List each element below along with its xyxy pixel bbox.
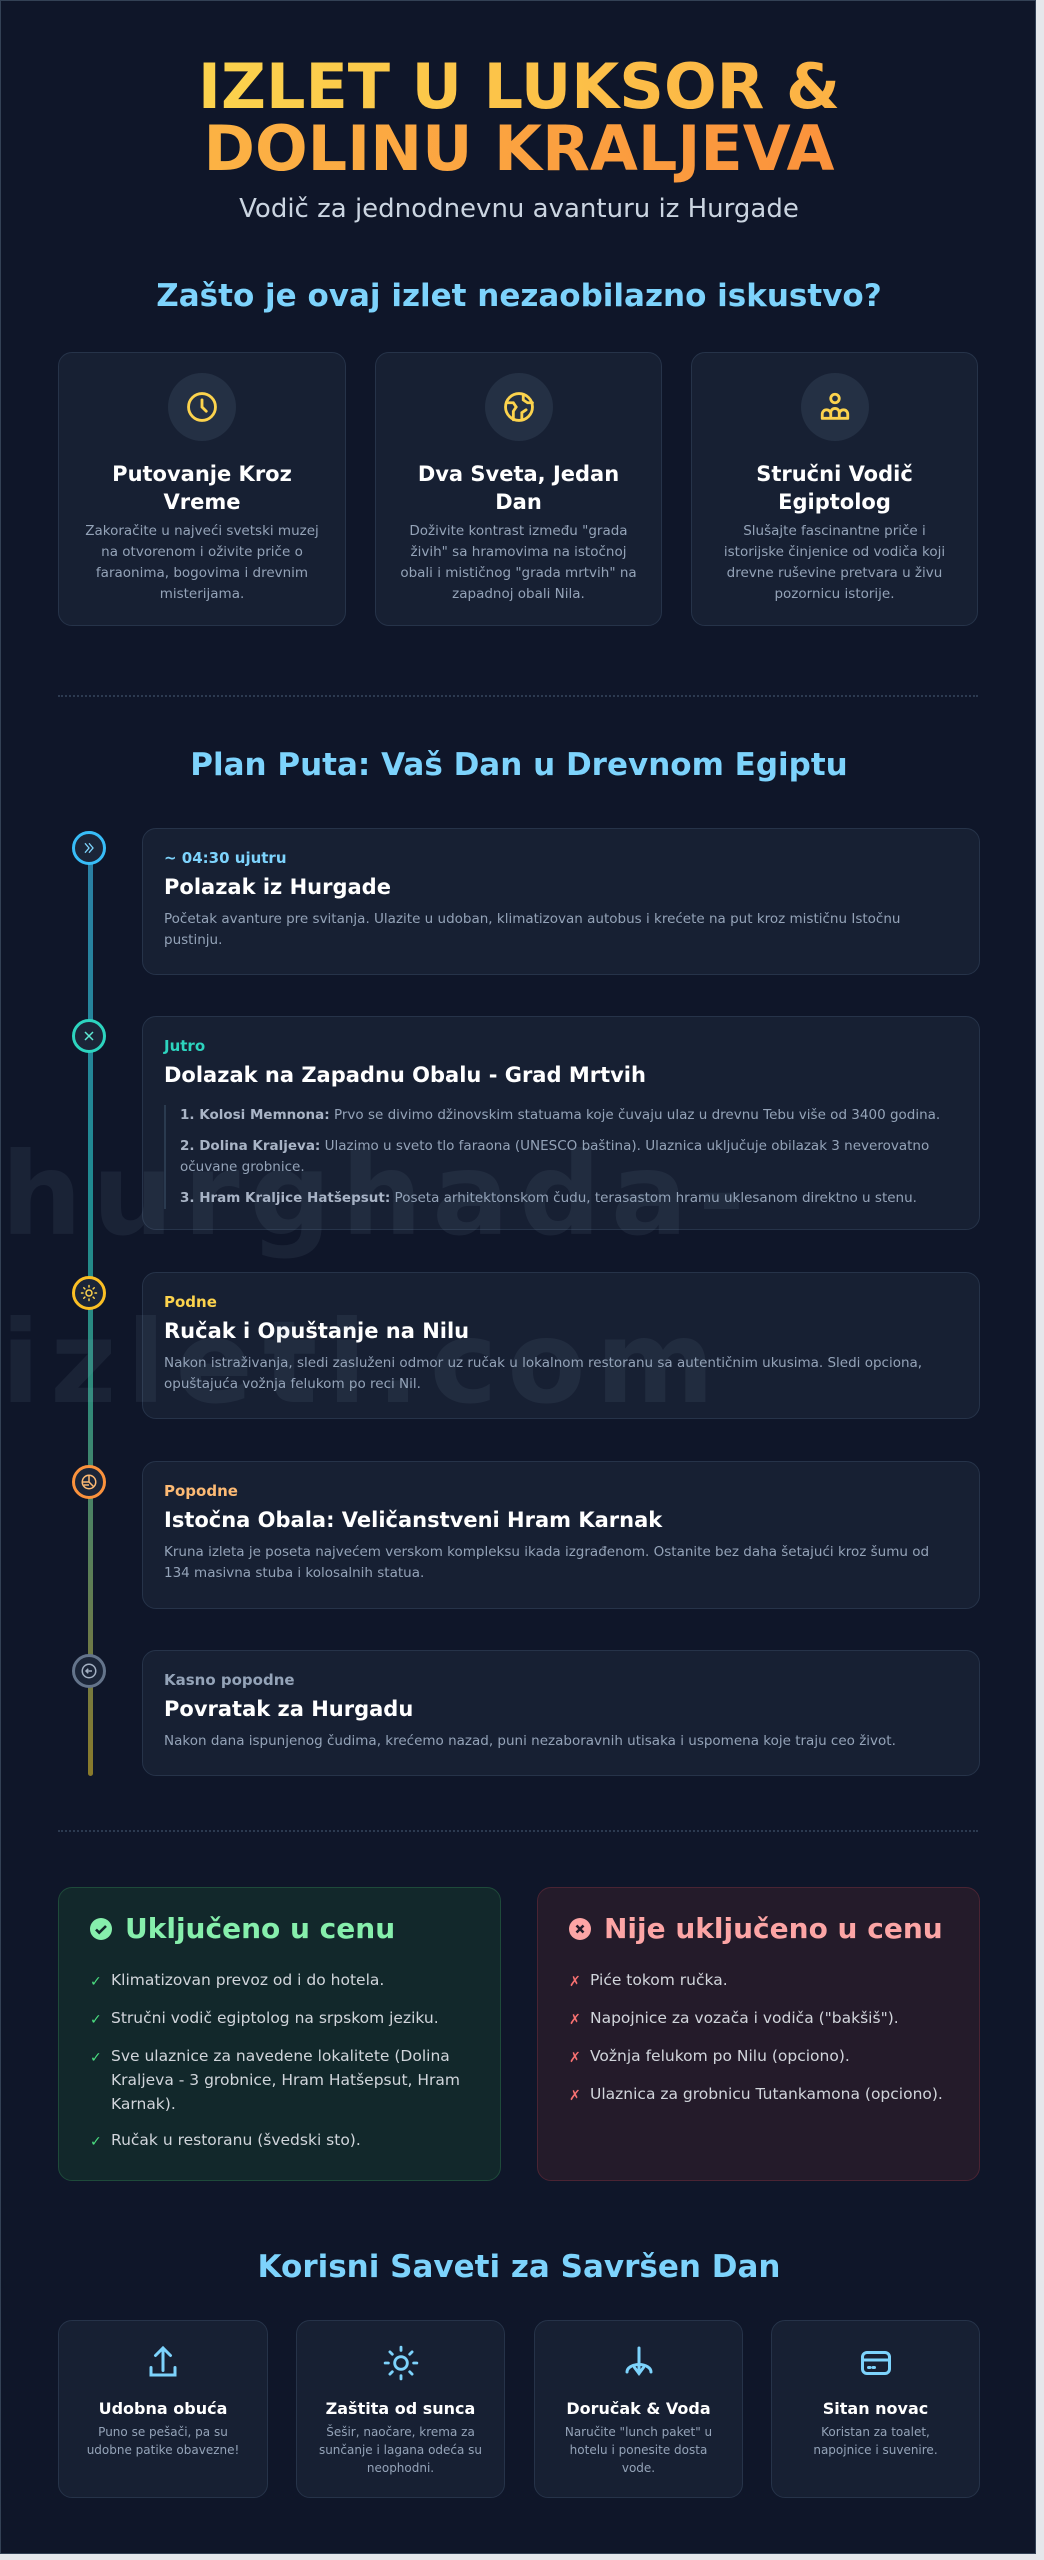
tip: sun <box>296 2320 505 2498</box>
tip: sun: Šešir, naočare, krema za sunčanje i lagana odeća su neophodni. <box>319 2425 482 2475</box>
list: included items <box>90 1971 460 2150</box>
timeline line <box>88 831 93 1776</box>
timeline step 2: Jutro <box>164 1037 205 1055</box>
heading: included: Uključeno u cenu <box>125 1912 395 1945</box>
icon: people <box>800 373 868 441</box>
icon: clock <box>168 373 236 441</box>
card: guide <box>691 352 978 626</box>
panel: not included: Piće tokom ručka. <box>590 1971 728 1989</box>
timeline step 2: Dolazak na Zapadnu Obalu - Grad Mrtvih <box>164 1063 646 1087</box>
tip: cash: Koristan za toalet, napojnice i suvenire. <box>813 2425 938 2457</box>
panel: included: Stručni vodič egiptolog na srpskom jeziku. <box>111 2009 439 2027</box>
card: two worlds: Dan <box>495 490 542 514</box>
tip: breakfast: Doručak & Voda <box>566 2399 711 2418</box>
title: IZLET U LUKSOR & <box>198 50 840 123</box>
tip: cash: Sitan novac <box>823 2399 928 2418</box>
icon: water <box>626 2346 652 2376</box>
icon: upload <box>150 2346 176 2376</box>
panel: not included: ✗ <box>569 2088 581 2104</box>
title <box>198 50 840 185</box>
icon: start <box>72 831 106 865</box>
icon: cross <box>72 1019 106 1053</box>
watermark: hurghada- <box>1 1128 755 1261</box>
panel: not included <box>537 1887 980 2181</box>
panel: included: Ručak u restoranu (švedski sto). <box>111 2131 361 2149</box>
icon: return <box>72 1654 106 1688</box>
card: time travel: Putovanje Kroz <box>112 462 292 486</box>
timeline step 3: Podne <box>164 1293 217 1311</box>
heading: plan: Plan Puta: Vaš Dan u Drevnom Egiptu <box>190 747 848 783</box>
card: two worlds <box>375 352 662 626</box>
timeline step 1 <box>72 828 980 975</box>
timeline step 3 <box>72 1272 980 1419</box>
timeline step 3: Nakon istraživanja, sledi zasluženi odmor uz ručak u lokalnom restoranu sa autentičnim ukusima. Sledi opciona, opuštajuća vožnja felukom po reci Nil. <box>164 1355 922 1392</box>
timeline step 1: Početak avanture pre svitanja. Ulazite u udoban, klimatizovan autobus i krećete na put kroz mističnu Istočnu pustinju. <box>164 911 900 948</box>
timeline step 2 <box>72 1016 980 1230</box>
timeline step 5: Povratak za Hurgadu <box>164 1697 413 1721</box>
panel: not included: ✗ <box>569 2012 581 2028</box>
icon: temple <box>72 1465 106 1499</box>
card: time travel: Vreme <box>164 490 240 514</box>
heading: why: Zašto je ovaj izlet nezaobilazno iskustvo? <box>156 278 882 314</box>
panel: tips <box>58 2320 980 2498</box>
heading: not included: Nije uključeno u cenu <box>604 1912 943 1945</box>
subtitle: Vodič za jednodnevnu avanturu iz Hurgade <box>239 194 799 224</box>
list: sites: 2. Dolina Kraljeva: Ulazimo u sveto tlo faraona (UNESCO baština). Ulaznica uključuje obilazak 3 neverovatno očuvane grobnice. <box>180 1138 929 1175</box>
card: guide: Stručni Vodič <box>756 462 913 486</box>
tip: cash <box>771 2320 980 2498</box>
card: guide: Slušajte fascinantne priče i istorijske činjenice od vodiča koji drevne ruševine pretvara u živu pozornicu istorije. <box>724 523 945 602</box>
watermark: izleti.com <box>1 1296 724 1429</box>
tip: shoes: Udobna obuća <box>99 2399 227 2418</box>
watermark <box>1 1128 755 1429</box>
timeline step 4: Istočna Obala: Veličanstveni Hram Karnak <box>164 1508 662 1532</box>
timeline step 4: Kruna izleta je poseta najvećem verskom kompleksu ikada izgrađenom. Ostanite bez daha šetajući kroz šumu od 134 masivna stuba i kolosalnih statua. <box>164 1544 929 1581</box>
list: sites: 1. Kolosi Memnona: Prvo se divimo džinovskim statuama koje čuvaju ulaz u drevnu Tebu više od 3400 godina. <box>180 1107 940 1123</box>
timeline step 4 <box>72 1461 980 1609</box>
card: time travel <box>58 352 346 626</box>
tip: shoes <box>58 2320 268 2498</box>
icon: globe <box>484 373 552 441</box>
timeline step 5: Kasno popodne <box>164 1671 295 1689</box>
timeline step 5 <box>72 1650 980 1776</box>
panel: included: ✓ <box>90 2012 102 2028</box>
panel: included: ✓ <box>90 2134 102 2150</box>
list: sites: 3. Hram Kraljice Hatšepsut: Poseta arhitektonskom čudu, terasastom hramu uklesanom direktno u stenu. <box>180 1190 917 1206</box>
timeline step 3: Ručak i Opuštanje na Nilu <box>164 1319 469 1343</box>
icon: card <box>861 2351 891 2375</box>
timeline step 1: ~ 04:30 ujutru <box>164 849 287 867</box>
list: sites <box>164 1105 965 1209</box>
title: DOLINU KRALJEVA <box>203 112 835 185</box>
timeline step 1: Polazak iz Hurgade <box>164 875 391 899</box>
card: two worlds: Dva Sveta, Jedan <box>418 462 619 486</box>
tip: sun: Zaštita od sunca <box>326 2399 475 2418</box>
timeline step 5: Nakon dana ispunjenog čudima, krećemo nazad, puni nezaboravnih utisaka i uspomena koje traju ceo život. <box>164 1733 896 1749</box>
panel: feature cards <box>58 352 978 626</box>
tip: breakfast: Naručite "lunch paket" u hotelu i ponesite dosta vode. <box>565 2425 712 2475</box>
list: excluded items <box>569 1971 943 2104</box>
tip: breakfast <box>534 2320 743 2498</box>
icon: sun <box>384 2346 418 2380</box>
panel: not included: Ulaznica za grobnicu Tutankamona (opciono). <box>590 2085 943 2103</box>
panel: not included: ✗ <box>569 2050 581 2066</box>
card: guide: Egiptolog <box>778 490 891 514</box>
heading: tips: Korisni Saveti za Savršen Dan <box>258 2249 780 2285</box>
panel: not included: ✗ <box>569 1974 581 1990</box>
card: two worlds: Doživite kontrast između "grada živih" sa hramovima na istočnoj obali i mističnog "grada mrtvih" na zapadnoj obali Nila. <box>400 523 637 602</box>
panel: included: Sve ulaznice za navedene lokalitete (Dolina Kraljeva - 3 grobnice, Hram Hatšepsut, Hram Karnak). <box>111 2047 460 2113</box>
panel: not included: Napojnice za vozača i vodiča ("bakšiš"). <box>590 2009 899 2027</box>
timeline step 4: Popodne <box>164 1482 238 1500</box>
panel: included: ✓ <box>90 2050 102 2066</box>
panel: included: ✓ <box>90 1974 102 1990</box>
card: time travel: Zakoračite u najveći svetski muzej na otvorenom i oživite priče o faraonima, bogovima i drevnim misterijama. <box>85 523 319 602</box>
tip: shoes: Puno se pešači, pa su udobne patike obavezne! <box>87 2425 239 2457</box>
panel: not included: Vožnja felukom po Nilu (opciono). <box>590 2047 850 2065</box>
panel: included <box>58 1887 501 2181</box>
icon: sun <box>72 1276 106 1310</box>
panel: included: Klimatizovan prevoz od i do hotela. <box>111 1971 384 1989</box>
